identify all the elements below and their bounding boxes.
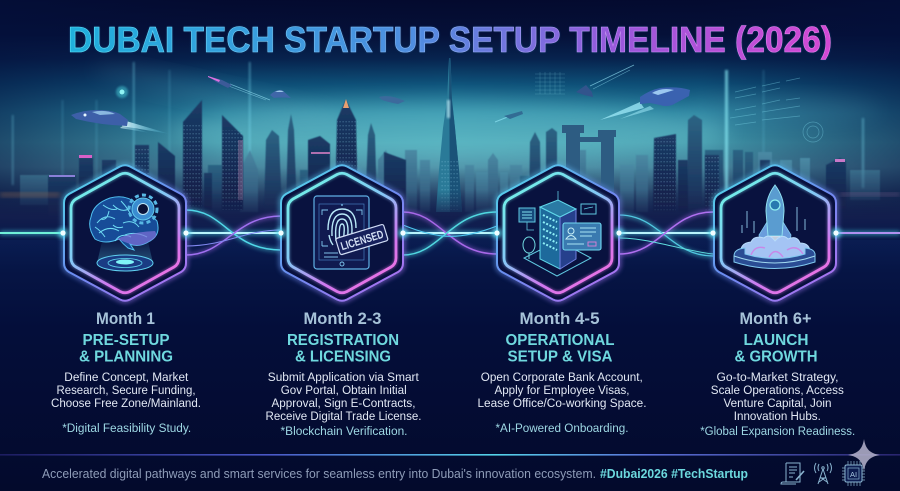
flying car small centre — [270, 90, 291, 98]
flying car with long trail — [576, 65, 634, 97]
step 2 text: Submit Application via Smart — [268, 370, 419, 384]
step 4 text: Scale Operations, Access — [711, 383, 844, 397]
step 2 text: REGISTRATION — [287, 332, 399, 349]
skyline: tower windows and accents — [0, 99, 900, 213]
flying car small right of centre — [379, 96, 405, 104]
step 1 text: Choose Free Zone/Mainland. — [51, 396, 201, 410]
skyline: near towers — [48, 100, 846, 216]
flying car left large — [71, 110, 170, 134]
step 1 text — [51, 310, 201, 435]
footer tagline: Accelerated digital pathways and smart services for seamless entry into Dubai's innovation ecosystem. — [42, 466, 596, 481]
sparkle watermark — [848, 439, 880, 471]
step 4 hexagon: rocket icon — [714, 165, 836, 301]
step 3 text: OPERATIONAL — [506, 332, 615, 349]
flying car right large — [600, 87, 690, 120]
step 2 text: *Blockchain Verification. — [280, 424, 408, 438]
footer rule — [0, 454, 900, 456]
footer icon: AI chip — [842, 461, 865, 486]
footer icon: AI chip: AI — [850, 470, 857, 479]
step 2 text: Approval, Sign E-Contracts, — [272, 396, 416, 410]
step 4 text: *Global Expansion Readiness. — [700, 424, 855, 438]
step 2 text: Month 2-3 — [304, 310, 382, 328]
step 3 text: Apply for Employee Visas, — [494, 383, 630, 397]
step 1 text: Month 1 — [96, 310, 155, 328]
step 2 text — [266, 310, 422, 438]
holographic data panel right — [730, 78, 823, 142]
step 2 text: Gov Portal, Obtain Initial — [281, 383, 407, 397]
step 4 text — [700, 310, 855, 438]
step 4 text: Innovation Hubs. — [734, 409, 821, 423]
icon: rocket launching — [734, 185, 815, 268]
step 1 hexagon: brain icon — [64, 165, 186, 301]
step 1 text: Define Concept, Market — [64, 370, 189, 384]
icon: tablet with fingerprint and stamp: LICENSED — [339, 229, 385, 253]
step 2 text: Receive Digital Trade License. — [266, 409, 422, 423]
step 1 text: *Digital Feasibility Study. — [62, 421, 191, 435]
timeline connector: neon lines and waves — [0, 210, 900, 256]
flying car small magenta — [208, 76, 270, 100]
step 2 text: & LICENSING — [295, 348, 391, 366]
city base fade — [0, 190, 900, 250]
step 3 text — [478, 310, 646, 435]
holographic grid panel — [535, 72, 565, 94]
step 1 text: & PLANNING — [79, 348, 173, 366]
step 4 text: Month 6+ — [740, 310, 812, 328]
step 4 text: Go-to-Market Strategy, — [716, 370, 838, 384]
step 3 hexagon: building icon — [497, 165, 619, 301]
glowing orb — [116, 86, 128, 98]
icon: brain and gear — [90, 195, 158, 271]
step 3 text: Open Corporate Bank Account, — [481, 370, 643, 384]
flying car near Burj — [495, 111, 523, 122]
step 3 text: Month 4-5 — [520, 310, 600, 328]
footer tagline: #Dubai2026 #TechStartup — [600, 466, 748, 481]
footer icon: document with pen — [781, 463, 804, 484]
skyline: mid towers — [208, 114, 753, 212]
icon: office tower with ID card — [519, 191, 601, 276]
step 4 text: & GROWTH — [734, 348, 818, 366]
footer icon: signal tower — [814, 463, 832, 484]
step 3 text: Lease Office/Co-working Space. — [478, 396, 646, 410]
timeline nodes — [58, 228, 841, 238]
step 2 hexagon: licensed tablet icon — [281, 165, 403, 301]
Museum of the Future bridge towers — [562, 125, 616, 212]
Burj Khalifa tower — [436, 58, 462, 212]
step 4 text: LAUNCH — [744, 332, 808, 349]
step 3 text: *AI-Powered Onboarding. — [496, 421, 628, 435]
vertical data light beams — [12, 62, 864, 212]
step 1 text: PRE-SETUP — [82, 332, 170, 349]
title: DUBAI TECH STARTUP SETUP TIMELINE (2026) — [68, 19, 832, 60]
step 4 text: Venture Capital, Join — [724, 396, 832, 410]
title: DUBAI TECH STARTUP SETUP TIMELINE (2026) — [68, 19, 832, 60]
step 1 text: Research, Secure Funding, — [56, 383, 196, 397]
skyline: distant towers — [20, 150, 880, 212]
step 3 text: SETUP & VISA — [508, 348, 613, 366]
